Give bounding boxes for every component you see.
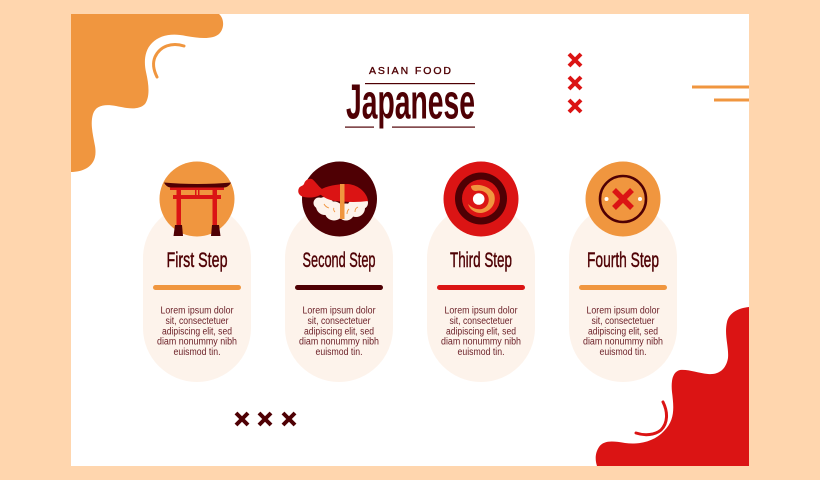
body text [441, 306, 521, 358]
white sheet [71, 14, 749, 466]
body text [299, 306, 379, 358]
body text: adipiscing elit, sed [446, 326, 516, 338]
body text: diam nonummy nibh [299, 336, 379, 348]
dark crosses [236, 413, 295, 425]
body text: Lorem ipsum dolor [586, 306, 660, 316]
body text: euismod tin. [600, 347, 646, 358]
title rules [345, 83, 475, 128]
red corner blob [596, 307, 749, 466]
body text: euismod tin. [174, 347, 220, 358]
heading: First Step [166, 249, 228, 272]
icon: shrimp sushi [298, 162, 377, 236]
body text: sit, consectetuer [166, 316, 229, 327]
red arc [636, 402, 667, 435]
body text: sit, consectetuer [450, 316, 513, 327]
body text: adipiscing elit, sed [304, 326, 374, 338]
card 3 [427, 204, 535, 382]
bar [295, 285, 383, 290]
orange lines at right [692, 86, 749, 102]
heading: Third Step [450, 249, 512, 272]
body text: euismod tin. [316, 347, 362, 358]
bar [579, 285, 667, 290]
icon: circle with cross [586, 162, 660, 236]
body text: diam nonummy nibh [583, 336, 663, 348]
card 2 [285, 204, 393, 382]
body text: sit, consectetuer [592, 316, 655, 327]
heading: Second Step [302, 249, 376, 272]
body text [583, 306, 663, 358]
body text: Lorem ipsum dolor [302, 306, 376, 316]
eyebrow: asian food: ASIAN FOOD [369, 65, 451, 77]
red crosses [569, 54, 581, 112]
heading: Fourth Step [587, 249, 659, 272]
icon: torii gate [160, 162, 234, 236]
body text: euismod tin. [458, 347, 504, 358]
orange arc [154, 44, 184, 77]
body text: diam nonummy nibh [441, 336, 521, 348]
icon: ramen swirl bowl [444, 162, 518, 236]
title block [345, 65, 475, 130]
body text [157, 306, 237, 358]
orange corner blob [71, 14, 223, 172]
step cards [143, 204, 677, 382]
body text: adipiscing elit, sed [162, 326, 232, 338]
body text: adipiscing elit, sed [588, 326, 658, 338]
title: Japanese: Japanese [346, 76, 475, 130]
bar [437, 285, 525, 290]
card 1 [143, 204, 251, 382]
body text: Lorem ipsum dolor [444, 306, 518, 316]
bar [153, 285, 241, 290]
body text: Lorem ipsum dolor [160, 306, 234, 316]
body text: diam nonummy nibh [157, 336, 237, 348]
body text: sit, consectetuer [308, 316, 371, 327]
card 4 [569, 204, 677, 382]
